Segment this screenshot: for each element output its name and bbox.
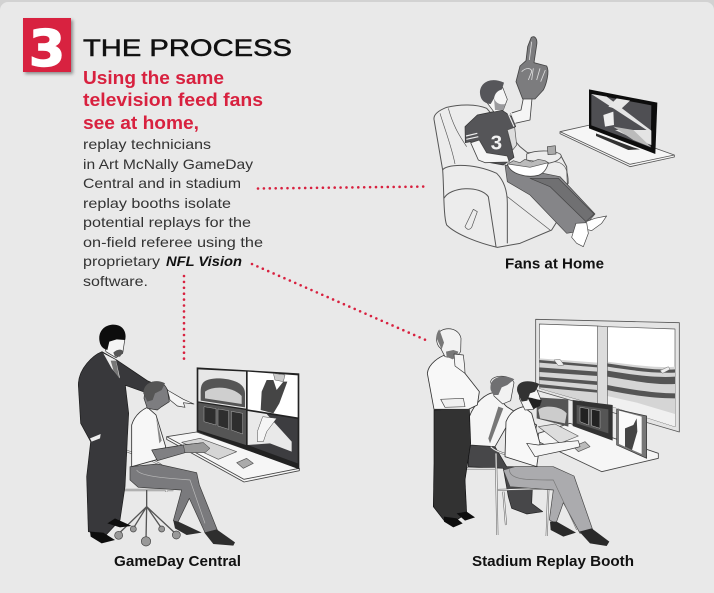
body text: software. xyxy=(83,273,148,289)
seated man arm xyxy=(152,443,204,461)
standing man xyxy=(433,408,471,522)
dotted connectors xyxy=(184,186,428,360)
body text: Central and in stadium xyxy=(83,175,241,191)
monitors xyxy=(537,397,568,427)
chair xyxy=(117,447,173,492)
TV stand xyxy=(560,125,674,167)
lowered arm xyxy=(471,140,509,163)
red lead-in heading xyxy=(83,68,263,133)
section number badge: 3 xyxy=(29,20,65,78)
desk xyxy=(538,423,658,472)
side table and can xyxy=(527,151,561,163)
desk xyxy=(167,432,299,482)
front seated man head xyxy=(519,385,542,410)
body text xyxy=(83,136,263,289)
stadium seen through window xyxy=(539,358,675,427)
seated man trousers xyxy=(130,464,217,533)
seated man head xyxy=(144,382,169,410)
caption: gameday central: GameDay Central xyxy=(114,553,241,570)
body text: on-field referee using the xyxy=(83,234,263,250)
body text: potential replays for the xyxy=(83,214,251,230)
red lead-in heading: Using the same xyxy=(83,68,224,88)
illustration: fans at home xyxy=(434,37,674,247)
feet xyxy=(586,216,607,231)
illustration: stadium replay booth xyxy=(427,319,679,546)
legs xyxy=(505,165,595,233)
seated man shirt xyxy=(132,407,166,467)
front chair xyxy=(463,447,548,536)
jersey number: 3 xyxy=(491,131,502,154)
window frame xyxy=(536,319,679,432)
illustration: gameday central xyxy=(78,325,299,546)
snack bowl xyxy=(507,163,548,176)
red lead-in heading: television feed fans xyxy=(83,90,263,110)
front seated man arm xyxy=(527,441,580,457)
raised arm xyxy=(511,98,532,123)
body text: in Art McNally GameDay xyxy=(83,156,253,172)
pointing hand xyxy=(167,390,194,407)
keyboard and mouse xyxy=(182,438,237,459)
title: THE PROCESS xyxy=(83,35,292,62)
keyboard and mouse xyxy=(538,424,578,443)
caption: fans at home: Fans at Home xyxy=(505,256,604,272)
head xyxy=(485,87,507,112)
front seated man shirt xyxy=(505,407,540,467)
front seated man trousers xyxy=(503,467,593,533)
jersey xyxy=(465,110,516,165)
red lead-in heading: see at home, xyxy=(83,113,199,133)
monitor wall xyxy=(197,367,299,469)
caption: stadium replay booth: Stadium Replay Booth xyxy=(472,553,634,570)
TV xyxy=(589,89,657,154)
standing man in suit xyxy=(78,352,169,535)
rear seated man xyxy=(468,445,543,514)
recliner xyxy=(434,105,568,247)
body text: replay technicians xyxy=(83,136,211,152)
body text: replay booths isolate xyxy=(83,195,231,211)
body text: proprietary xyxy=(83,253,160,269)
body text: NFL Vision xyxy=(166,253,242,269)
foam finger xyxy=(516,37,548,99)
